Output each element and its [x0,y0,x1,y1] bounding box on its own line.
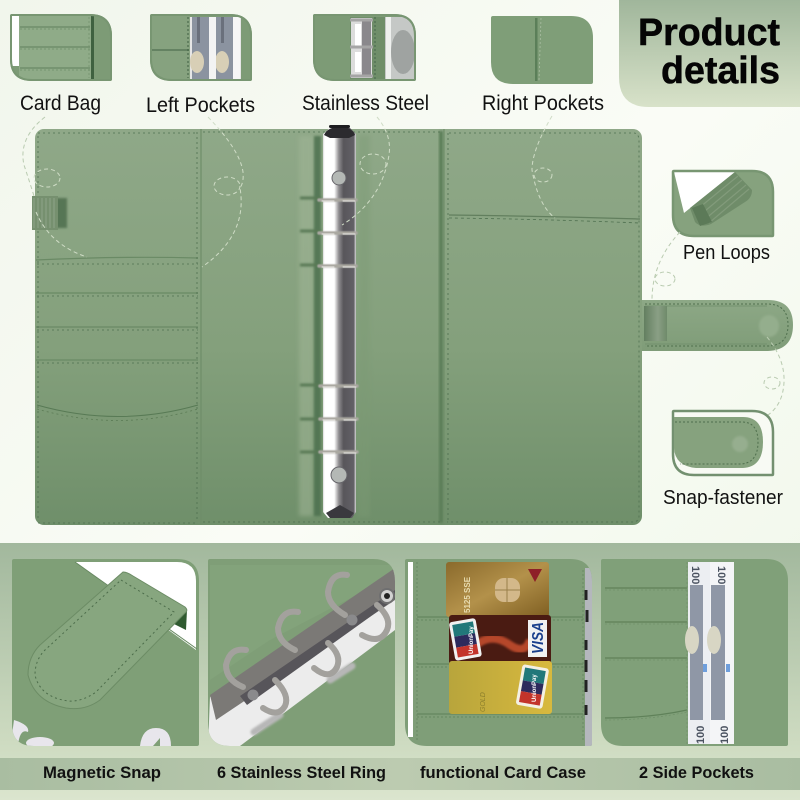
elastic band [690,172,752,226]
label: left pockets: Left Pockets [146,94,255,117]
callout: card bag [23,117,87,257]
yellow card: UnionPay [532,674,538,702]
bills: 100 [695,726,707,744]
callout: pen loops [652,232,680,300]
bills in pocket [190,17,241,79]
ring arcs [226,575,388,713]
bill [385,17,416,79]
label: pen loops: Pen Loops [683,242,770,264]
caption: magnetic snap: Magnetic Snap [43,763,161,782]
bottom band [0,543,800,800]
rivets [332,171,346,185]
open binder [32,125,642,525]
gold card [446,562,549,617]
spine shadows [299,131,443,523]
caption: six stainless steel ring: 6 Stainless Steel Ring [217,763,386,782]
clasp strap [640,300,793,351]
label: snap-fastener: Snap-fastener [663,487,783,509]
bills: 100 [715,566,727,584]
rivets [248,589,394,700]
six rings [319,200,357,453]
yellow card [449,661,552,714]
caption: functional card case: functional Card Case [420,763,586,782]
panel: six stainless steel rings [208,559,395,746]
label: stainless steel: Stainless Steel [302,92,429,115]
title text: Product [638,12,780,54]
red card [449,615,551,665]
panel: two side pockets [601,559,788,746]
label: card bag: Card Bag [20,92,101,115]
left pocket panel [36,129,201,525]
callout: left pockets [202,117,243,267]
thumbnail: snap-fastener [673,411,773,475]
caption: two side pockets: 2 Side Pockets [639,763,754,782]
label: right pockets: Right Pockets [482,92,604,115]
bills: 100 [719,726,731,744]
thumbnail: right pockets [491,16,593,84]
thumbnail: card bag [10,14,112,81]
callout: stainless steel [342,117,390,225]
thumbnail: stainless steel [313,14,416,81]
red card: VISA [530,622,547,654]
red card: UnionPay [469,626,475,654]
title panel [619,0,800,107]
yellow card: GOLD [480,692,487,712]
label band [0,758,800,790]
metal ring rail [319,125,357,518]
callout: right pockets [532,116,555,218]
thumbnail: left pockets [150,14,252,81]
elastic pen loop [644,306,667,341]
thumbnail: pen loops [672,170,774,237]
gold card: 5125 SSE [463,576,472,613]
snap cutouts [12,720,171,746]
title text: details [661,50,780,92]
panel: magnetic snap [12,559,199,749]
right pocket panel [444,129,640,525]
bills: 100 [689,566,701,584]
title text [638,12,780,92]
binder rings [350,18,373,78]
panel: functional card case [405,559,592,746]
pen loop on cover [32,196,67,230]
callout: snap-fastener [764,337,784,415]
strap [28,572,187,709]
bills [685,562,734,744]
